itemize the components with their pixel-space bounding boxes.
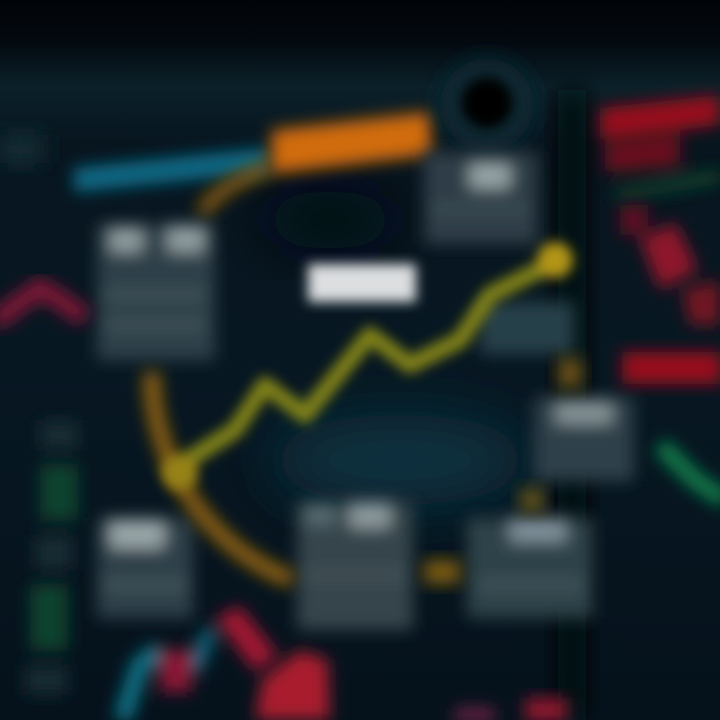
bar: blue banner	[74, 148, 268, 192]
panel: middle right card	[480, 302, 574, 354]
chart: green vertical bars left	[25, 420, 78, 695]
bar: orange banner	[270, 112, 432, 174]
panel: bottom left card	[97, 518, 193, 618]
chart: red bottom marks	[455, 698, 567, 720]
panel: right card	[534, 397, 634, 481]
line: green descending right	[660, 445, 720, 500]
icon: dark circle	[441, 59, 533, 151]
line: red squiggle left	[0, 288, 85, 322]
chart: teal and red bottom strokes	[122, 606, 330, 720]
panel: left card	[97, 224, 215, 360]
connector: orange link right	[558, 358, 582, 388]
panel: left edge gray tag	[0, 135, 42, 163]
connector: orange curve left	[152, 372, 292, 580]
chart: red bars top right	[600, 95, 720, 202]
bar: red lower right	[622, 352, 720, 384]
connector: orange link bottom right up	[520, 488, 544, 512]
connector: orange top left curve	[202, 168, 268, 214]
chart: red candles right	[620, 205, 720, 325]
label: central white block	[308, 264, 416, 302]
panel: top right card	[424, 152, 538, 244]
panel: bottom right card	[467, 518, 593, 618]
line chart: yellow rising line	[162, 242, 573, 490]
connector: orange link centre to right card	[424, 560, 460, 584]
panel: centre bottom card	[297, 502, 413, 630]
